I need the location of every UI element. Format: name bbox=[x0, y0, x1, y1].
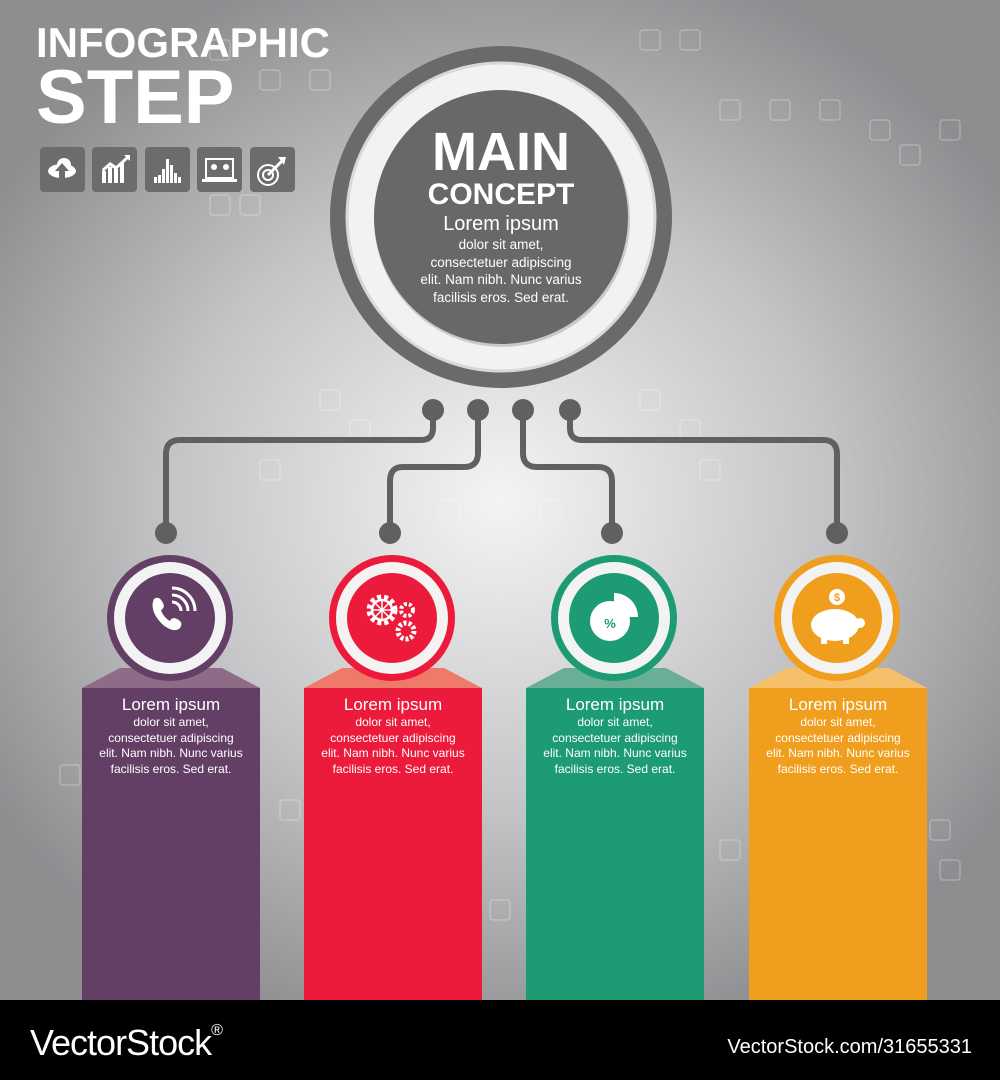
text: step 4: Lorem ipsum bbox=[789, 695, 887, 714]
text: step 1: dolor sit amet, bbox=[133, 715, 209, 729]
text: step 3: elit. Nam nibh. Nunc varius bbox=[543, 746, 687, 760]
icon: pie chart bbox=[590, 593, 638, 641]
text: step 2 bbox=[321, 695, 465, 776]
main concept circle bbox=[330, 46, 672, 388]
footer bar: VectorStock.com/31655331 bbox=[727, 1036, 972, 1058]
icon: pie chart: % bbox=[604, 616, 616, 631]
icon row bbox=[40, 147, 295, 192]
text: step 2: consectetuer adipiscing bbox=[330, 730, 456, 744]
icon: gears bbox=[369, 597, 414, 639]
text: step 2: Lorem ipsum bbox=[344, 695, 442, 714]
text: step 3: dolor sit amet, bbox=[577, 715, 653, 729]
main concept text: facilisis eros. Sed erat. bbox=[433, 290, 569, 304]
text: step 3: Lorem ipsum bbox=[566, 695, 664, 714]
text: step 3: consectetuer adipiscing bbox=[552, 730, 678, 744]
panel: step 2 red bbox=[304, 555, 482, 1000]
connector lines bbox=[155, 399, 848, 544]
panel: step 4 orange bbox=[749, 555, 927, 1000]
title: INFOGRAPHIC bbox=[36, 19, 330, 66]
icon: phone bbox=[153, 588, 195, 630]
title bbox=[36, 19, 330, 140]
text: step 4: facilisis eros. Sed erat. bbox=[778, 762, 898, 776]
title: STEP bbox=[36, 55, 234, 140]
main concept text: CONCEPT bbox=[428, 178, 574, 211]
text: step 2: dolor sit amet, bbox=[355, 715, 431, 729]
icon: piggy bank bbox=[811, 589, 865, 644]
text: step 2: elit. Nam nibh. Nunc varius bbox=[321, 746, 465, 760]
footer bar bbox=[0, 1000, 1000, 1080]
icon: piggy bank: $ bbox=[834, 592, 840, 604]
text: step 2: facilisis eros. Sed erat. bbox=[333, 762, 453, 776]
text: step 4: elit. Nam nibh. Nunc varius bbox=[766, 746, 910, 760]
main concept text: elit. Nam nibh. Nunc varius bbox=[420, 272, 582, 287]
text: step 4: dolor sit amet, bbox=[800, 715, 876, 729]
main concept text bbox=[420, 122, 582, 304]
text: step 3: facilisis eros. Sed erat. bbox=[555, 762, 675, 776]
main concept text: Lorem ipsum bbox=[443, 213, 559, 235]
text: step 1: consectetuer adipiscing bbox=[108, 730, 234, 744]
text: step 1: facilisis eros. Sed erat. bbox=[111, 762, 231, 776]
main concept text: MAIN bbox=[432, 122, 570, 182]
text: step 1: Lorem ipsum bbox=[122, 695, 220, 714]
text: step 1 bbox=[99, 695, 243, 776]
panel: step 1 purple bbox=[82, 555, 260, 1000]
text: step 1: elit. Nam nibh. Nunc varius bbox=[99, 746, 243, 760]
text: step 3 bbox=[543, 695, 687, 776]
main concept text: dolor sit amet, bbox=[459, 237, 543, 252]
footer bar: VectorStock® bbox=[30, 1022, 222, 1063]
main concept text: consectetuer adipiscing bbox=[430, 254, 572, 270]
text: step 4: consectetuer adipiscing bbox=[775, 730, 901, 744]
panel: step 3 green bbox=[526, 555, 704, 1000]
text: step 4 bbox=[766, 695, 910, 776]
